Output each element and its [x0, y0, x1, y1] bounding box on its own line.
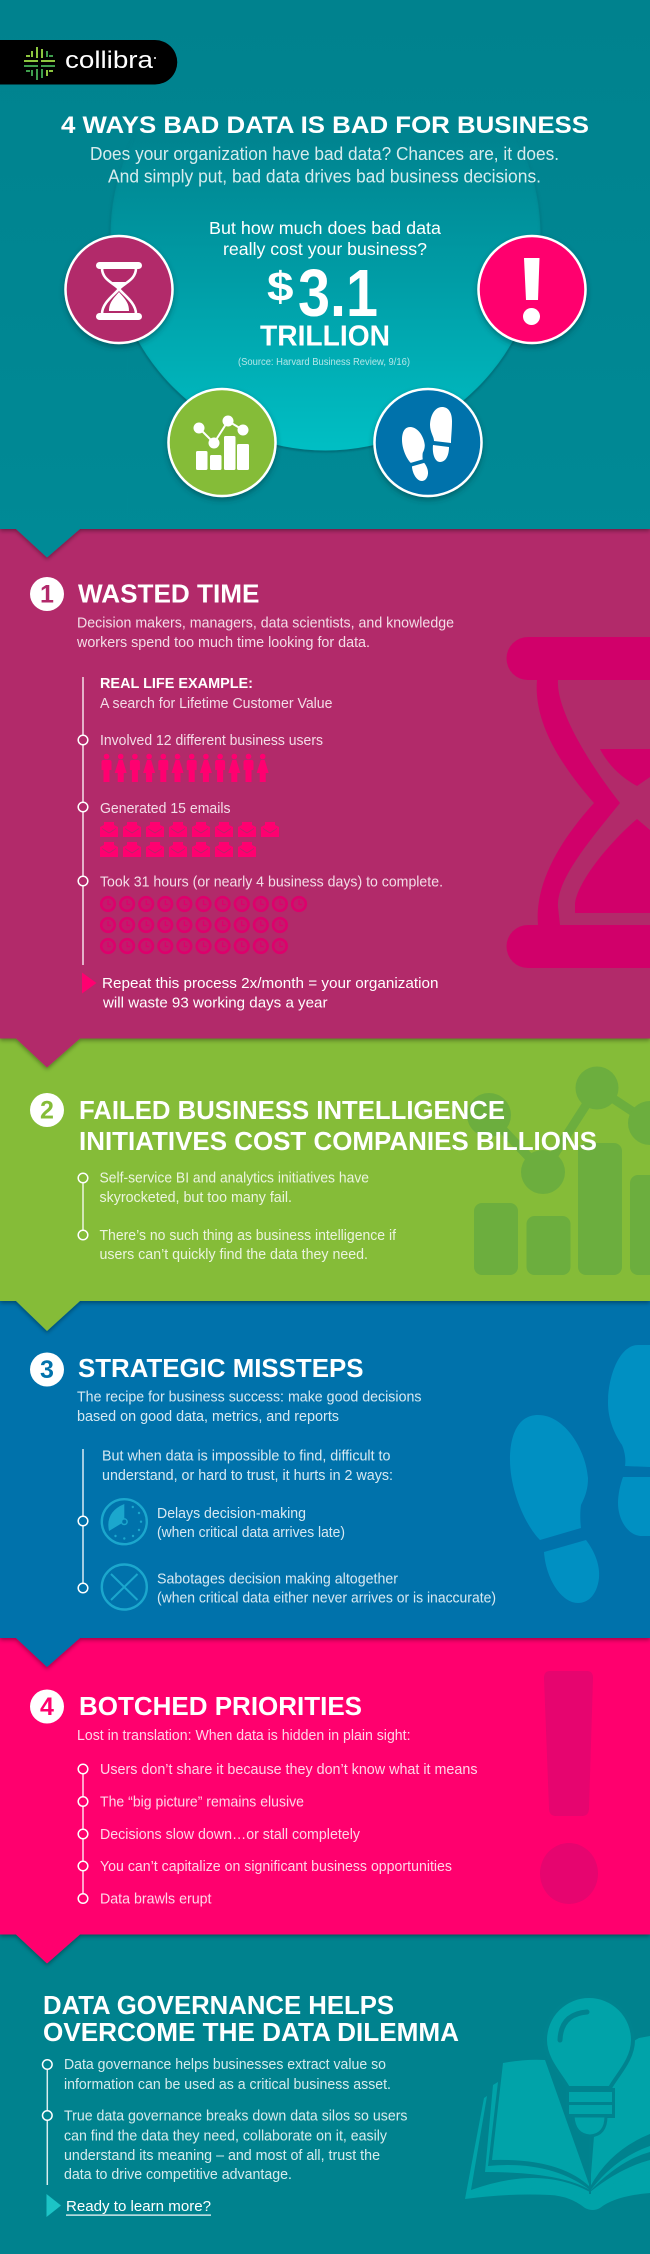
heading: failed business intelligence: INITIATIVES COST COMPANIES BILLIONS: [79, 1128, 597, 1156]
watermark icon: chart: [467, 1066, 650, 1275]
pictogram: 31 clocks: [101, 897, 306, 953]
bullet list: Decisions slow down…or stall completely: [100, 1827, 361, 1843]
text block: breaking silos: [64, 2108, 408, 2183]
central disc: [110, 20, 541, 451]
text block: two ways: understand, or hard to trust, it hurts in 2 ways:: [102, 1468, 393, 1484]
text block: sabotages decision making: [157, 1572, 496, 1606]
bullet list: [100, 1762, 478, 1908]
text block: governance value: information can be used as a critical business asset.: [64, 2077, 391, 2093]
logo: collibra: [0, 40, 177, 84]
call to action link: Ready to learn more?: [66, 2198, 211, 2215]
number badge 3: [30, 1352, 64, 1386]
text: 31 hours: Took 31 hours (or nearly 4 business days) to complete.: [100, 874, 443, 890]
text block: no such thing: users can’t quickly find the data they need.: [100, 1247, 368, 1263]
bullet list: Users don’t share it because they don’t know what it means: [100, 1762, 478, 1778]
icon: cross: [102, 1564, 147, 1610]
question text: really cost your business?: [223, 239, 427, 259]
text block: real life example: REAL LIFE EXAMPLE:: [100, 676, 253, 692]
intro text: Lost in translation: When data is hidden in plain sight:: [77, 1728, 410, 1744]
title: 4 WAYS BAD DATA IS BAD FOR BUSINESS: [61, 112, 589, 139]
number badge 4: 4: [40, 1693, 54, 1721]
arrow: conclusion: [82, 972, 96, 994]
watermark icon: lightbulb over book: [465, 1996, 650, 2210]
number badge 4: [30, 1690, 64, 1724]
intro text: based on good data, metrics, and reports: [77, 1409, 339, 1425]
timeline with bullets: [78, 677, 88, 965]
hero band with notch: [0, 0, 650, 558]
panel: data governance: [42, 1990, 650, 2217]
big number: $3.1 trillion: $: [267, 263, 294, 310]
icon: exclamation badge: [478, 236, 586, 343]
heading: failed business intelligence: FAILED BUSINESS INTELLIGENCE: [79, 1097, 505, 1125]
section band with notch: [0, 1030, 650, 1331]
big number: $3.1 trillion: TRILLION: [260, 320, 390, 352]
heading: data governance: OVERCOME THE DATA DILEMMA: [43, 2017, 459, 2047]
text block: delays decision-making: Delays decision-making: [157, 1506, 306, 1522]
panel: 3 strategic missteps: [0, 1295, 650, 1667]
intro text: [76, 616, 454, 651]
pictogram: 15 emails: [100, 822, 279, 857]
section band with notch: [0, 1295, 650, 1667]
timeline with bullets: [78, 1764, 88, 1903]
timeline with bullets: [42, 2060, 52, 2185]
intro text: The recipe for business success: make good decisions: [77, 1390, 422, 1406]
text block: breaking silos: True data governance breaks down data silos so users: [64, 2108, 408, 2124]
heading: data governance: DATA GOVERNANCE HELPS: [43, 1990, 394, 2020]
text block: initiatives fail: [100, 1170, 369, 1206]
bullet list: The “big picture” remains elusive: [100, 1794, 304, 1810]
number badge 1: [30, 577, 64, 611]
icon: footprints badge: [374, 389, 482, 496]
text block: sabotages decision making: Sabotages decision making altogether: [157, 1572, 398, 1588]
text block: real life example: A search for Lifetime Customer Value: [100, 696, 332, 712]
arrow: call to action: [46, 2194, 61, 2217]
text block: no such thing: [100, 1228, 397, 1263]
text: 15 emails: Generated 15 emails: [100, 801, 230, 817]
number badge 2: [30, 1093, 64, 1127]
question text: But how much does bad data: [209, 218, 441, 238]
timeline with bullets: [78, 1449, 88, 1593]
heading: strategic missteps: STRATEGIC MISSTEPS: [78, 1355, 364, 1383]
intro text: workers spend too much time looking for data.: [76, 635, 370, 651]
text block: delays decision-making: [157, 1506, 345, 1541]
text block: sabotages decision making: (when critical data either never arrives or is inaccurate): [157, 1590, 496, 1606]
big number: $3.1 trillion: 3.1: [298, 256, 378, 331]
bullet list: Data brawls erupt: [100, 1892, 212, 1908]
text block: two ways: But when data is impossible to find, difficult to: [102, 1448, 390, 1464]
heading: wasted time: WASTED TIME: [78, 580, 260, 608]
text block: two ways: [102, 1448, 393, 1484]
number badge 2: 2: [40, 1096, 54, 1124]
section band with notch: [0, 500, 650, 1068]
pictogram: 12 people: [102, 754, 269, 782]
icon: hourglass badge: [66, 236, 172, 343]
panel: hero: [0, 0, 650, 558]
panel: 4 botched priorities: [0, 1630, 650, 1964]
text block: breaking silos: can find the data they need, collaborate on it, easily: [64, 2128, 388, 2144]
intro text: [77, 1390, 422, 1425]
text block: governance value: Data governance helps businesses extract value so: [64, 2057, 386, 2073]
subtitle: [90, 143, 559, 186]
timeline with bullets: [78, 1173, 88, 1240]
subtitle: Does your organization have bad data? Chances are, it does.: [90, 143, 559, 164]
text: 12 users: Involved 12 different business users: [100, 733, 323, 749]
panel: 2 failed business intelligence: [0, 1030, 650, 1331]
text block: governance value: [64, 2057, 391, 2093]
number badge 3: 3: [40, 1356, 54, 1384]
panel: 1 wasted time: [0, 500, 650, 1068]
text block: no such thing: There’s no such thing as business intelligence if: [100, 1228, 397, 1244]
callout: 93 working days: Repeat this process 2x/month = your organization: [102, 975, 438, 992]
heading: botched priorities: BOTCHED PRIORITIES: [79, 1693, 362, 1721]
big number: $3.1 trillion: [260, 256, 390, 352]
section band with notch: [0, 1630, 650, 1964]
icon: clock delay: [102, 1499, 147, 1544]
intro text: Decision makers, managers, data scientists, and knowledge: [77, 616, 454, 632]
text block: breaking silos: data to drive competitive advantage.: [64, 2167, 292, 2183]
heading: data governance: [43, 1990, 459, 2047]
number badge 1: 1: [40, 580, 54, 608]
text block: real life example: [100, 676, 332, 712]
question text: [209, 218, 441, 259]
text block: initiatives fail: skyrocketed, but too many fail.: [100, 1190, 292, 1206]
text block: initiatives fail: Self-service BI and analytics initiatives have: [100, 1170, 369, 1186]
callout: 93 working days: will waste 93 working days a year: [102, 994, 327, 1012]
watermark icon: footprints: [510, 1345, 650, 1603]
logo mark: [24, 47, 55, 80]
subtitle: And simply put, bad data drives bad business decisions.: [108, 166, 541, 186]
text block: breaking silos: understand its meaning – and most of all, trust the: [64, 2148, 380, 2164]
text block: delays decision-making: (when critical data arrives late): [157, 1525, 345, 1541]
bullet list: You can’t capitalize on significant business opportunities: [100, 1859, 452, 1875]
callout: 93 working days: [102, 975, 438, 1012]
icon: chart badge: [168, 389, 276, 496]
source note: (Source: Harvard Business Review, 9/16): [238, 357, 410, 368]
watermark icon: exclamation: [540, 1671, 598, 1904]
section background: closing teal panel: [0, 1930, 650, 2254]
heading: failed business intelligence: [79, 1097, 597, 1156]
watermark icon: hourglass: [506, 637, 650, 968]
logo: collibra: collibra: [65, 47, 154, 74]
